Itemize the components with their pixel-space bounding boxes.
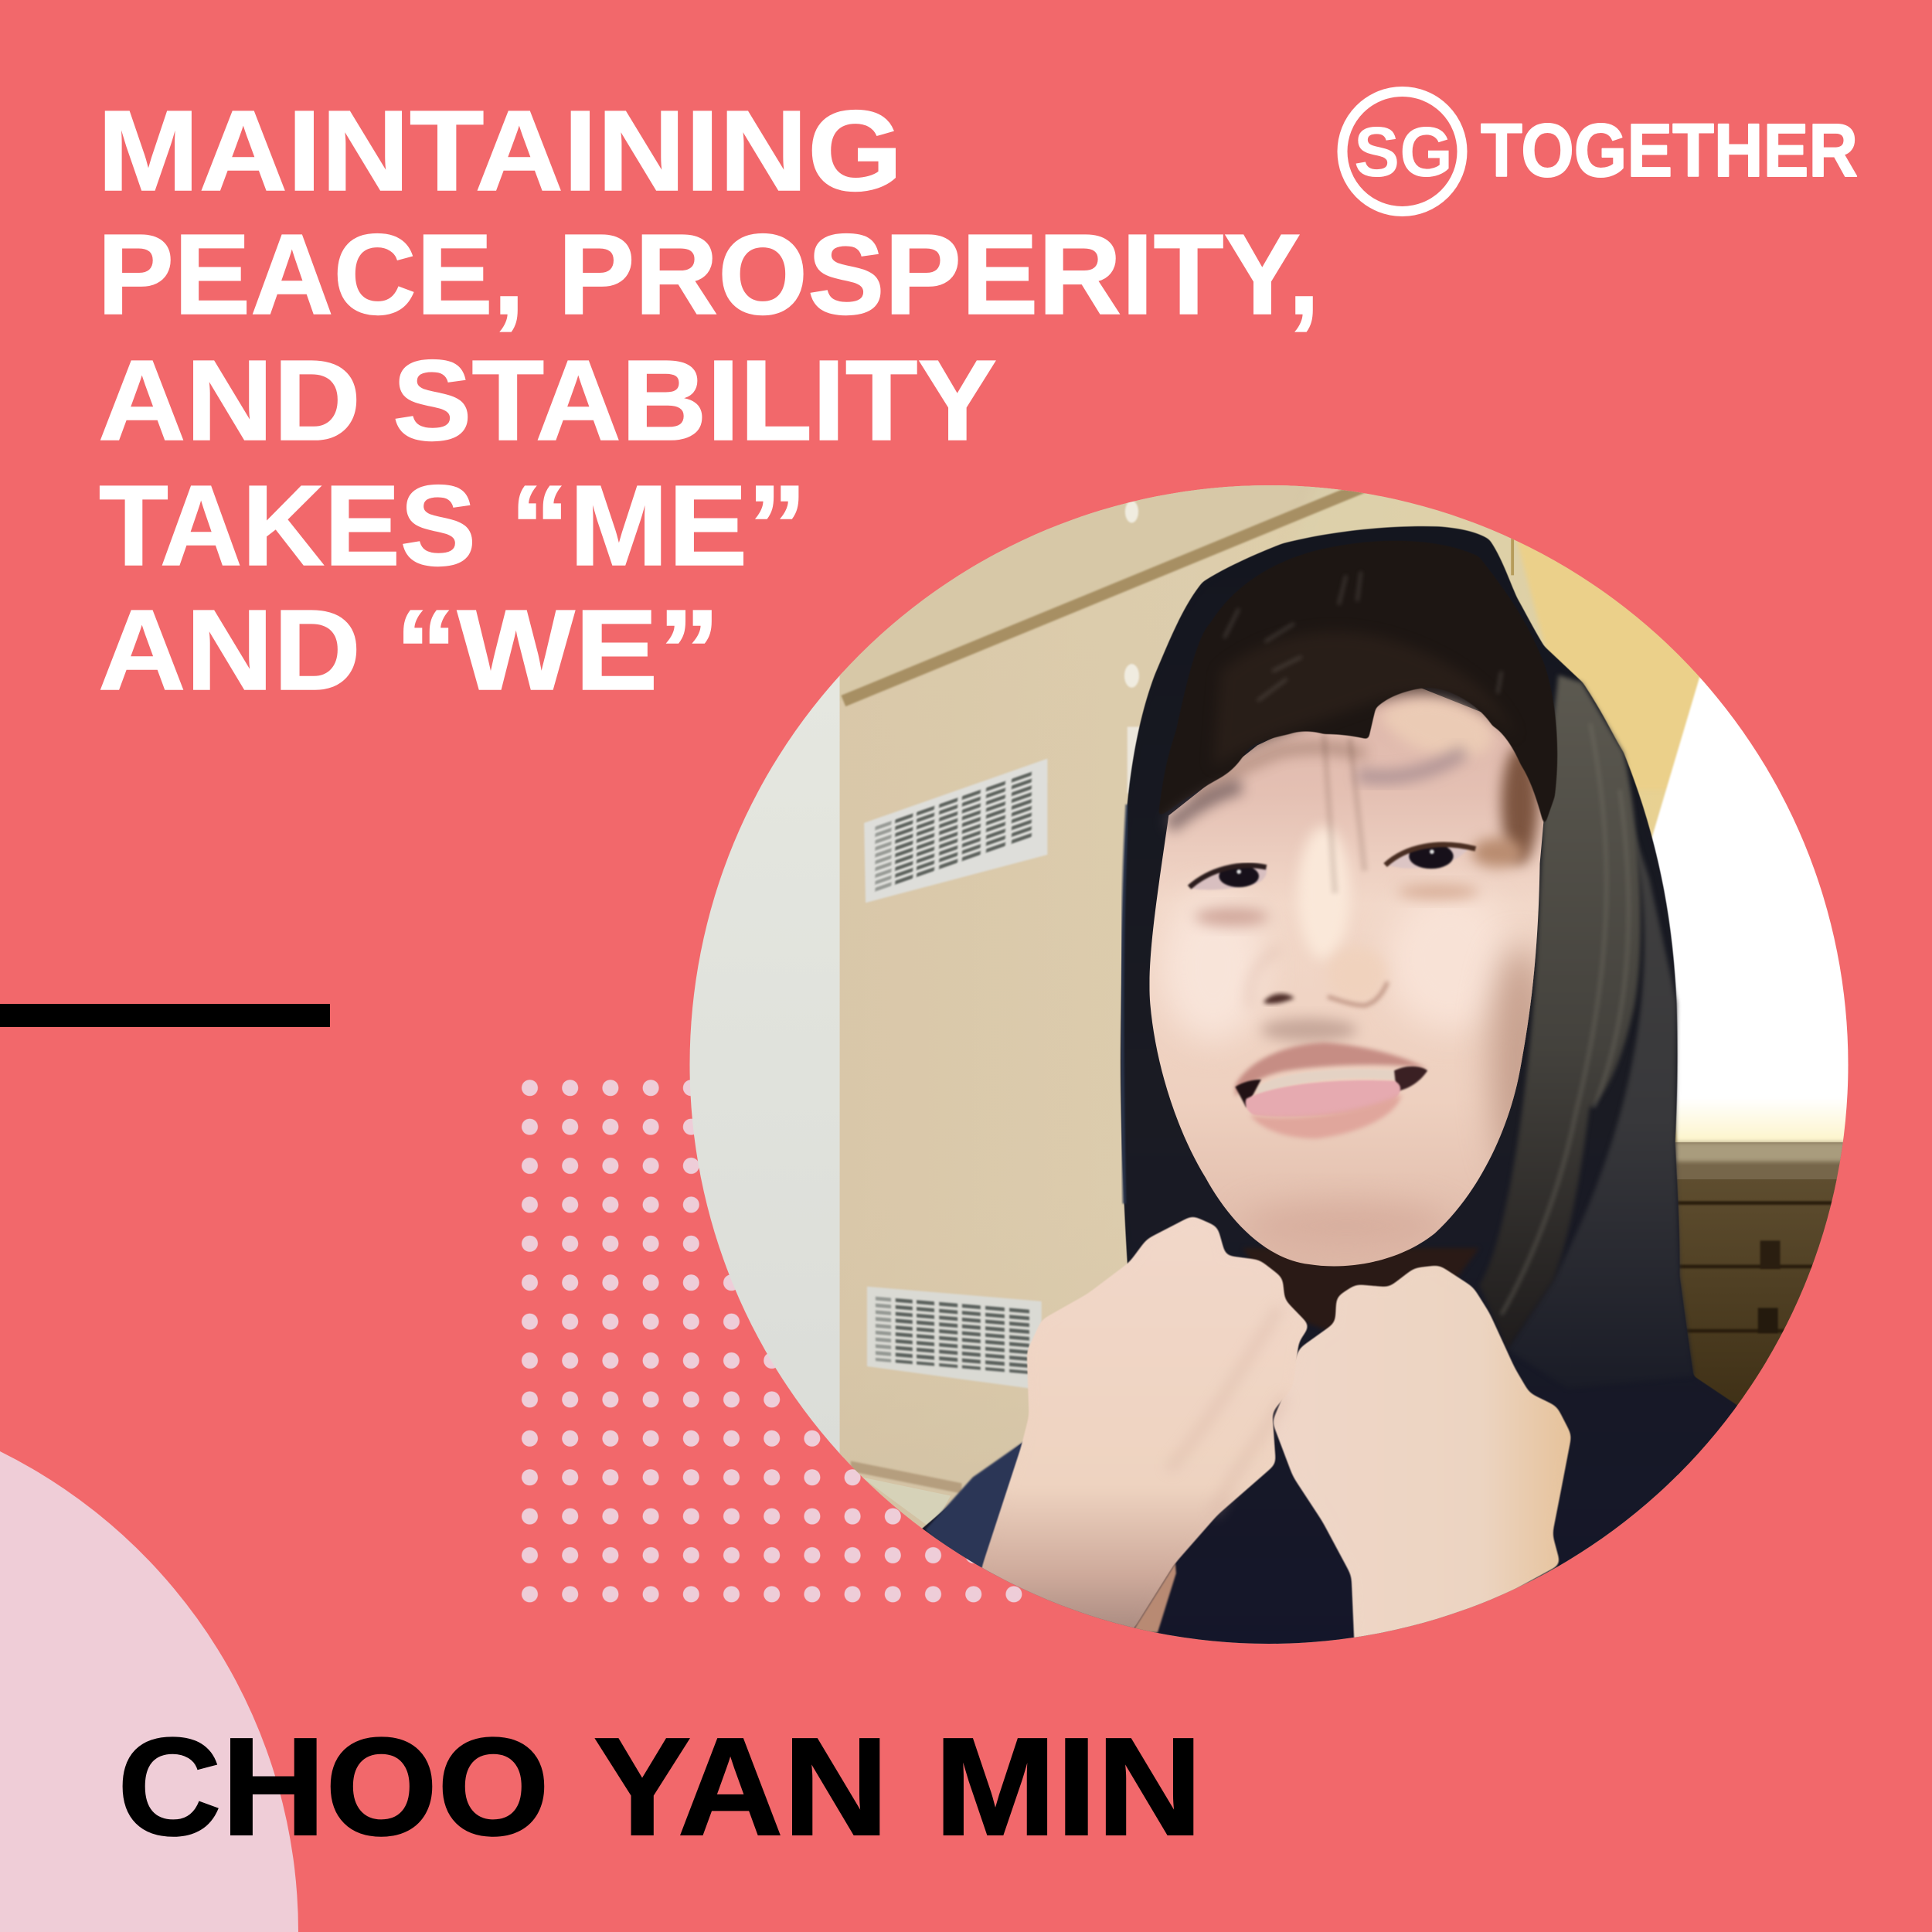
- name: YAN: [594, 1709, 889, 1865]
- photo: hood and body: [922, 526, 1737, 1644]
- photo: right eye: [1386, 844, 1475, 869]
- title: “ME”: [510, 462, 807, 590]
- photo: left eye: [1189, 865, 1267, 890]
- photo: white wall: [689, 672, 844, 1458]
- photo: nose: [1250, 947, 1387, 1008]
- logo ring: [1342, 91, 1462, 212]
- title: “WE”: [395, 587, 720, 714]
- photo: neck shadow: [1245, 1248, 1476, 1329]
- photo: sleeve: [926, 1441, 1025, 1588]
- portrait photo in circle: [681, 464, 1893, 1677]
- photo: hand crease shading: [1168, 1308, 1284, 1514]
- photo: left hand: [977, 1216, 1310, 1632]
- title: PROSPERITY,: [558, 211, 1320, 338]
- decorative pink quarter circle: [0, 1451, 298, 1932]
- name: CHOO: [117, 1709, 549, 1865]
- photo: face: [1150, 688, 1544, 1266]
- photo: window light: [1651, 677, 1849, 1145]
- photo: eyebrows: [1168, 786, 1241, 827]
- title: AND: [98, 587, 361, 714]
- photo: cheek highlights: [1162, 893, 1265, 1041]
- title: TAKES: [99, 462, 476, 590]
- photo: hairline soft shadow: [1191, 747, 1365, 797]
- photo: hair: [1158, 541, 1557, 893]
- photo: right hand: [1272, 1265, 1572, 1677]
- photo: hood inner fold: [1479, 675, 1641, 1349]
- title: STABILITY: [393, 337, 997, 464]
- logo wordmark: TOGETHER: [1481, 108, 1858, 192]
- photo: dark cabinet lower right: [1675, 1139, 1843, 1475]
- title: PEACE,: [97, 211, 525, 338]
- logo SG letters: SG: [1354, 113, 1453, 192]
- dot grid: [509, 1068, 1034, 1614]
- title: [97, 87, 1320, 714]
- photo: mouth: [1235, 1043, 1427, 1138]
- logo: SG Together: [1342, 91, 1858, 212]
- photo: shadow under nose: [1261, 1018, 1357, 1042]
- name: [117, 1709, 1202, 1865]
- title: AND: [98, 337, 361, 464]
- photo: hood fold highlights: [1502, 723, 1628, 1315]
- photo: upper wall vent: [864, 759, 1047, 903]
- photo: forehead patch: [1379, 698, 1493, 757]
- title: MAINTAINING: [97, 87, 903, 215]
- photo: lower wall vent: [867, 1287, 1042, 1390]
- photo: hood outer shell: [1521, 840, 1696, 1375]
- black accent bar: [0, 1004, 330, 1027]
- photo: wooden cabinets: [840, 464, 1712, 1677]
- photo: wrist sliver: [1131, 1563, 1176, 1632]
- name: MIN: [934, 1709, 1202, 1865]
- photo: eye bags: [1195, 907, 1268, 927]
